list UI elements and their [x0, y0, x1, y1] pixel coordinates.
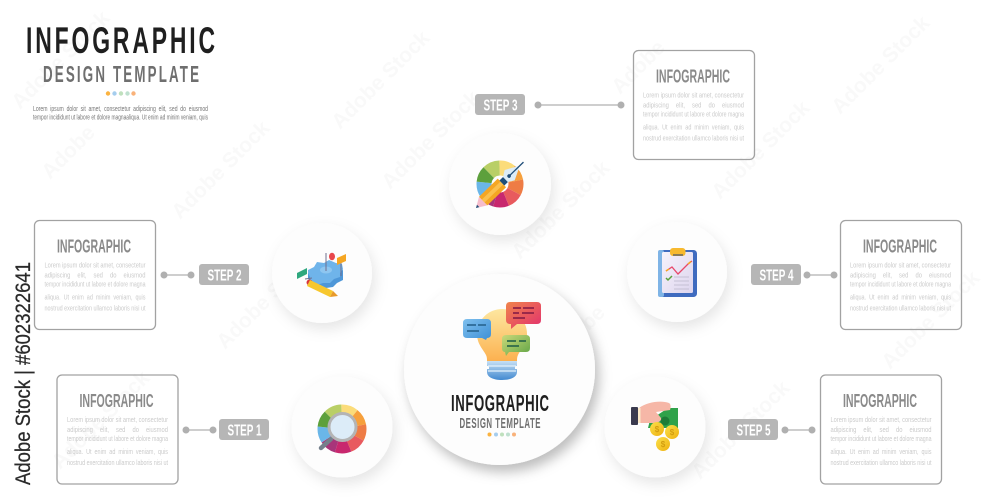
- title description: Lorem ipsum dolor sit amet, consectetur adipiscing elit, sed do eiusmod: [33, 104, 208, 113]
- step 5 label: [728, 419, 778, 440]
- panel: step 5 text box: INFOGRAPHIC: [843, 391, 917, 411]
- panel: step 5 text box: [820, 375, 942, 484]
- step 5 label: STEP 5: [736, 422, 771, 440]
- panel: step 1 text box: adipiscing elit, sed do eiusmod: [67, 425, 168, 434]
- panel: step 4 text box: aliqua. Ut enim ad minim veniam, quis: [850, 292, 951, 302]
- panel: step 3 text box: [634, 50, 754, 160]
- panel: step 5 text box: nostrud exercitation ullamco laboris nisi ut: [830, 458, 932, 467]
- step 4 label: STEP 4: [760, 268, 794, 284]
- background watermark: Adobe Stock: [507, 156, 615, 264]
- background watermark: Adobe Stock: [47, 366, 155, 474]
- step 2 circle: [272, 223, 372, 323]
- title description: tempor incididunt ut labore et dolore magnaaliqua. Ut enim ad minim veniam, quis: [33, 112, 208, 122]
- background watermark: Adobe Stock: [377, 86, 485, 194]
- icon: light bulb with speech bubbles: [463, 302, 541, 380]
- background watermark: Adobe Stock: [707, 96, 815, 204]
- panel: step 4 text box: tempor incididunt ut labore et dolore magna: [850, 280, 952, 288]
- icon: isometric gear with pencil and signs: [297, 253, 346, 297]
- panel: step 2 text box: adipiscing elit, sed do eiusmod: [44, 270, 146, 280]
- panel: step 2 text box: aliqua. Ut enim ad minim veniam, quis: [44, 292, 146, 302]
- panel: step 1 text box: tempor incididunt ut labore et dolore magna: [67, 434, 169, 443]
- panel: step 2 text box: nostrud exercitation ullamco laboris nisi ut: [44, 304, 146, 312]
- background watermark: Adobe Stock: [327, 26, 435, 134]
- panel: step 3 text box: tempor incididunt ut labore et dolore magna: [643, 110, 745, 118]
- title block: [26, 19, 215, 122]
- title: INFOGRAPHIC: [26, 19, 215, 61]
- step 2 label: [199, 264, 249, 285]
- panel: step 1 text box: Lorem ipsum dolor sit amet, consectetur: [67, 415, 168, 424]
- panel: step 1 text box: aliqua. Ut enim ad minim veniam, quis: [67, 447, 168, 456]
- step 4 circle: [627, 222, 727, 322]
- connector: step 5: [782, 426, 816, 434]
- connector: step 2: [160, 272, 194, 278]
- connector: step 3: [534, 102, 624, 108]
- panel: step 1 text box: nostrud exercitation ullamco laboris nisi ut: [67, 458, 169, 467]
- subtitle: DESIGN TEMPLATE: [43, 61, 199, 87]
- icon: clipboard with chart: [658, 248, 697, 297]
- background watermark: Adobe: [37, 121, 100, 184]
- step 2 label: STEP 2: [208, 268, 242, 284]
- step 1 label: STEP 1: [228, 422, 262, 440]
- background watermark: Adobe: [607, 36, 670, 99]
- step 3 label: STEP 3: [484, 98, 518, 114]
- panel: step 2 text box: INFOGRAPHIC: [57, 236, 131, 256]
- panel: step 4 text box: INFOGRAPHIC: [863, 236, 937, 256]
- background watermark: Adobe Stock: [687, 376, 795, 484]
- central dots: [488, 432, 516, 436]
- step 1 circle: [292, 376, 392, 478]
- panel: step 5 text box: adipiscing elit, sed do eiusmod: [830, 425, 932, 434]
- central title: INFOGRAPHIC: [451, 391, 549, 417]
- panel: step 2 text box: Lorem ipsum dolor sit amet, consectetur: [44, 260, 146, 270]
- icon: hand dropping coins: [631, 402, 679, 451]
- step 5 circle: [604, 376, 706, 478]
- background watermark: Adobe Stock: [7, 6, 115, 114]
- connector: step 4: [804, 272, 838, 278]
- panel: step 4 text box: nostrud exercitation ullamco laboris nisi ut: [850, 304, 952, 312]
- panel: step 2 text box: tempor incididunt ut labore et dolore magna: [44, 280, 146, 288]
- panel: step 1 text box: [57, 375, 178, 484]
- background watermark: Adobe Stock: [827, 11, 935, 119]
- panel: step 3 text box: nostrud exercitation ullamco laboris nisi ut: [643, 134, 745, 142]
- background watermark: Adobe: [547, 301, 610, 364]
- title dots: [106, 91, 136, 96]
- panel: step 5 text box: tempor incididunt ut labore et dolore magna: [830, 434, 932, 443]
- step 1 label: [219, 419, 269, 440]
- central subtitle: DESIGN TEMPLATE: [460, 416, 541, 432]
- panel: step 5 text box: Lorem ipsum dolor sit amet, consectetur: [830, 415, 932, 424]
- step 4 label: [751, 264, 801, 285]
- panel: step 4 text box: adipiscing elit, sed do eiusmod: [850, 270, 951, 280]
- panel: step 2 text box: [34, 220, 156, 330]
- panel: step 3 text box: INFOGRAPHIC: [656, 66, 730, 86]
- panel: step 3 text box: Lorem ipsum dolor sit amet, consectetur: [643, 90, 744, 100]
- icon: colour wheel with pencil and pen nib: [471, 157, 528, 213]
- background watermark: Adobe Stock: [877, 266, 985, 374]
- title description: [33, 104, 208, 122]
- central circle: [404, 274, 595, 465]
- connector: step 1: [182, 426, 216, 434]
- panel: step 3 text box: adipiscing elit, sed do eiusmod: [643, 100, 744, 110]
- step 3 circle: [449, 133, 551, 235]
- step 3 label: [475, 94, 525, 115]
- panel: step 5 text box: aliqua. Ut enim ad minim veniam, quis: [830, 447, 932, 456]
- background watermark: Adobe Stock: [167, 116, 275, 224]
- panel: step 3 text box: aliqua. Ut enim ad minim veniam, quis: [643, 122, 744, 132]
- icon: colour wheel with magnifying glass: [321, 413, 358, 448]
- vertical stock label: Adobe Stock | #602322641: [12, 262, 35, 485]
- icon: hand dropping coins: $: [655, 425, 660, 434]
- panel: step 1 text box: INFOGRAPHIC: [80, 391, 154, 411]
- icon: hand dropping coins: $: [661, 440, 666, 449]
- panel: step 4 text box: [840, 220, 962, 330]
- icon: hand dropping coins: $: [670, 428, 675, 437]
- panel: step 4 text box: Lorem ipsum dolor sit amet, consectetur: [850, 260, 951, 270]
- background watermark: Adobe Stock: [212, 246, 320, 354]
